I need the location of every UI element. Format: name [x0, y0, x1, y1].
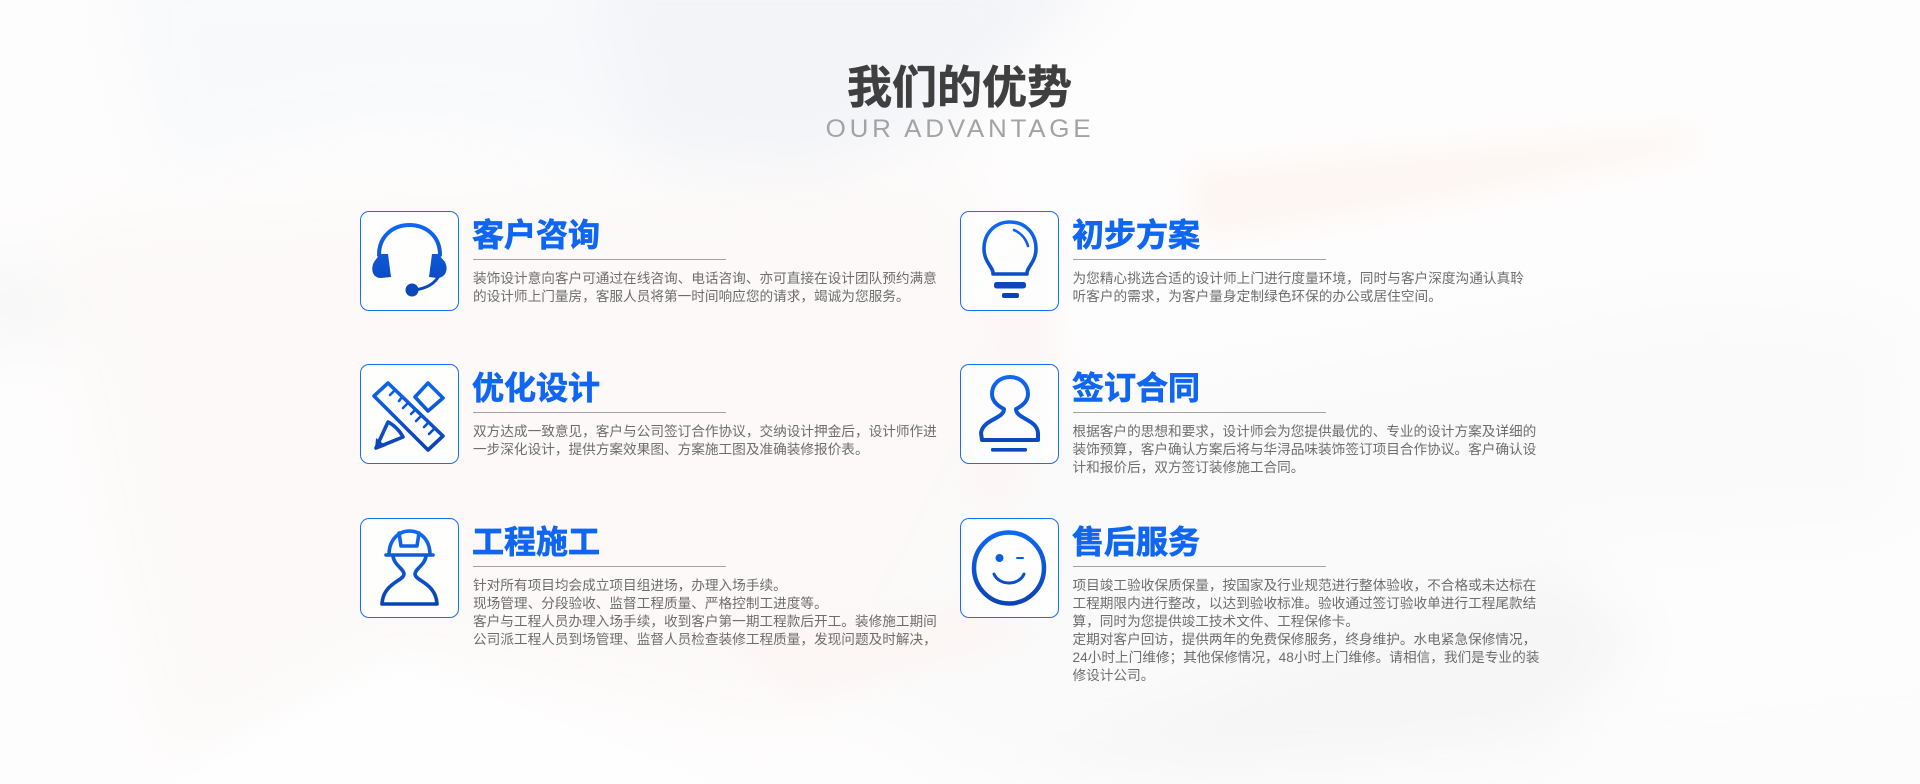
description: 装饰设计意向客户可通过在线咨询、电话咨询、亦可直接在设计团队预约满意	[473, 271, 937, 286]
rule	[473, 412, 726, 413]
rule	[1073, 566, 1326, 567]
heading: 初步方案	[1072, 217, 1200, 253]
description: 公司派工程人员到场管理、监督人员检查装修工程质量，发现问题及时解决，	[473, 632, 937, 647]
description	[1072, 424, 1536, 475]
panel: 初步方案	[960, 211, 1524, 311]
description: 计和报价后，双方签订装修施工合同。	[1072, 460, 1304, 475]
description: 客户与工程人员办理入场手续，收到客户第一期工程款后开工。装修施工期间	[473, 614, 937, 629]
icon: light bulb	[960, 211, 1059, 311]
description: 工程期限内进行整改，以达到验收标准。验收通过签订验收单进行工程尾款结	[1072, 596, 1536, 611]
description: 现场管理、分段验收、监督工程质量、严格控制工进度等。	[473, 596, 828, 611]
panel: 签订合同	[960, 364, 1536, 475]
heading: 工程施工	[472, 524, 600, 560]
description: 定期对客户回访，提供两年的免费保修服务，终身维护。水电紧急保修情况，	[1072, 632, 1536, 647]
icon: construction worker	[360, 518, 459, 618]
panel: 工程施工	[360, 518, 937, 647]
panel: 售后服务	[960, 518, 1539, 683]
rule	[473, 566, 726, 567]
panel: 客户咨询	[360, 211, 937, 311]
description: 装饰预算，客户确认方案后将与华浔品味装饰签订项目合作协议。客户确认设	[1072, 442, 1536, 457]
description: 双方达成一致意见，客户与公司签订合作协议，交纳设计押金后，设计师作进	[473, 424, 937, 439]
heading: 客户咨询	[472, 217, 600, 253]
description	[1072, 578, 1539, 683]
description: 算，同时为您提供竣工技术文件、工程保修卡。	[1072, 614, 1359, 629]
description: 的设计师上门量房，客服人员将第一时间响应您的请求，竭诚为您服务。	[473, 289, 910, 304]
rule	[1073, 259, 1326, 260]
panel: 优化设计	[360, 364, 937, 464]
heading: 签订合同	[1072, 370, 1200, 406]
description	[473, 424, 937, 457]
description: 一步深化设计，提供方案效果图、方案施工图及准确装修报价表。	[473, 442, 869, 457]
icon: ruler and pencil	[360, 364, 459, 464]
description: 根据客户的思想和要求，设计师会为您提供最优的、专业的设计方案及详细的	[1072, 424, 1536, 439]
description	[473, 271, 937, 304]
rule	[473, 259, 726, 260]
heading: 售后服务	[1072, 524, 1200, 560]
subtitle: OUR ADVANTAGE	[826, 115, 1094, 143]
heading: 优化设计	[472, 370, 600, 406]
description: 修设计公司。	[1072, 668, 1154, 683]
description	[473, 578, 937, 647]
description	[1072, 271, 1524, 304]
description: 针对所有项目均会成立项目组进场，办理入场手续。	[473, 578, 787, 593]
title: 我们的优势	[847, 62, 1072, 113]
description: 项目竣工验收保质保量，按国家及行业规范进行整体验收，不合格或未达标在	[1072, 578, 1536, 593]
icon: stamp	[960, 364, 1059, 464]
description: 听客户的需求，为客户量身定制绿色环保的办公或居住空间。	[1072, 289, 1442, 304]
icon: winking smiley	[960, 518, 1059, 618]
rule	[1073, 412, 1326, 413]
icon: headset	[360, 211, 459, 311]
description: 为您精心挑选合适的设计师上门进行度量环境，同时与客户深度沟通认真聆	[1072, 271, 1524, 286]
description: 24小时上门维修；其他保修情况，48小时上门维修。请相信，我们是专业的装	[1072, 650, 1539, 665]
